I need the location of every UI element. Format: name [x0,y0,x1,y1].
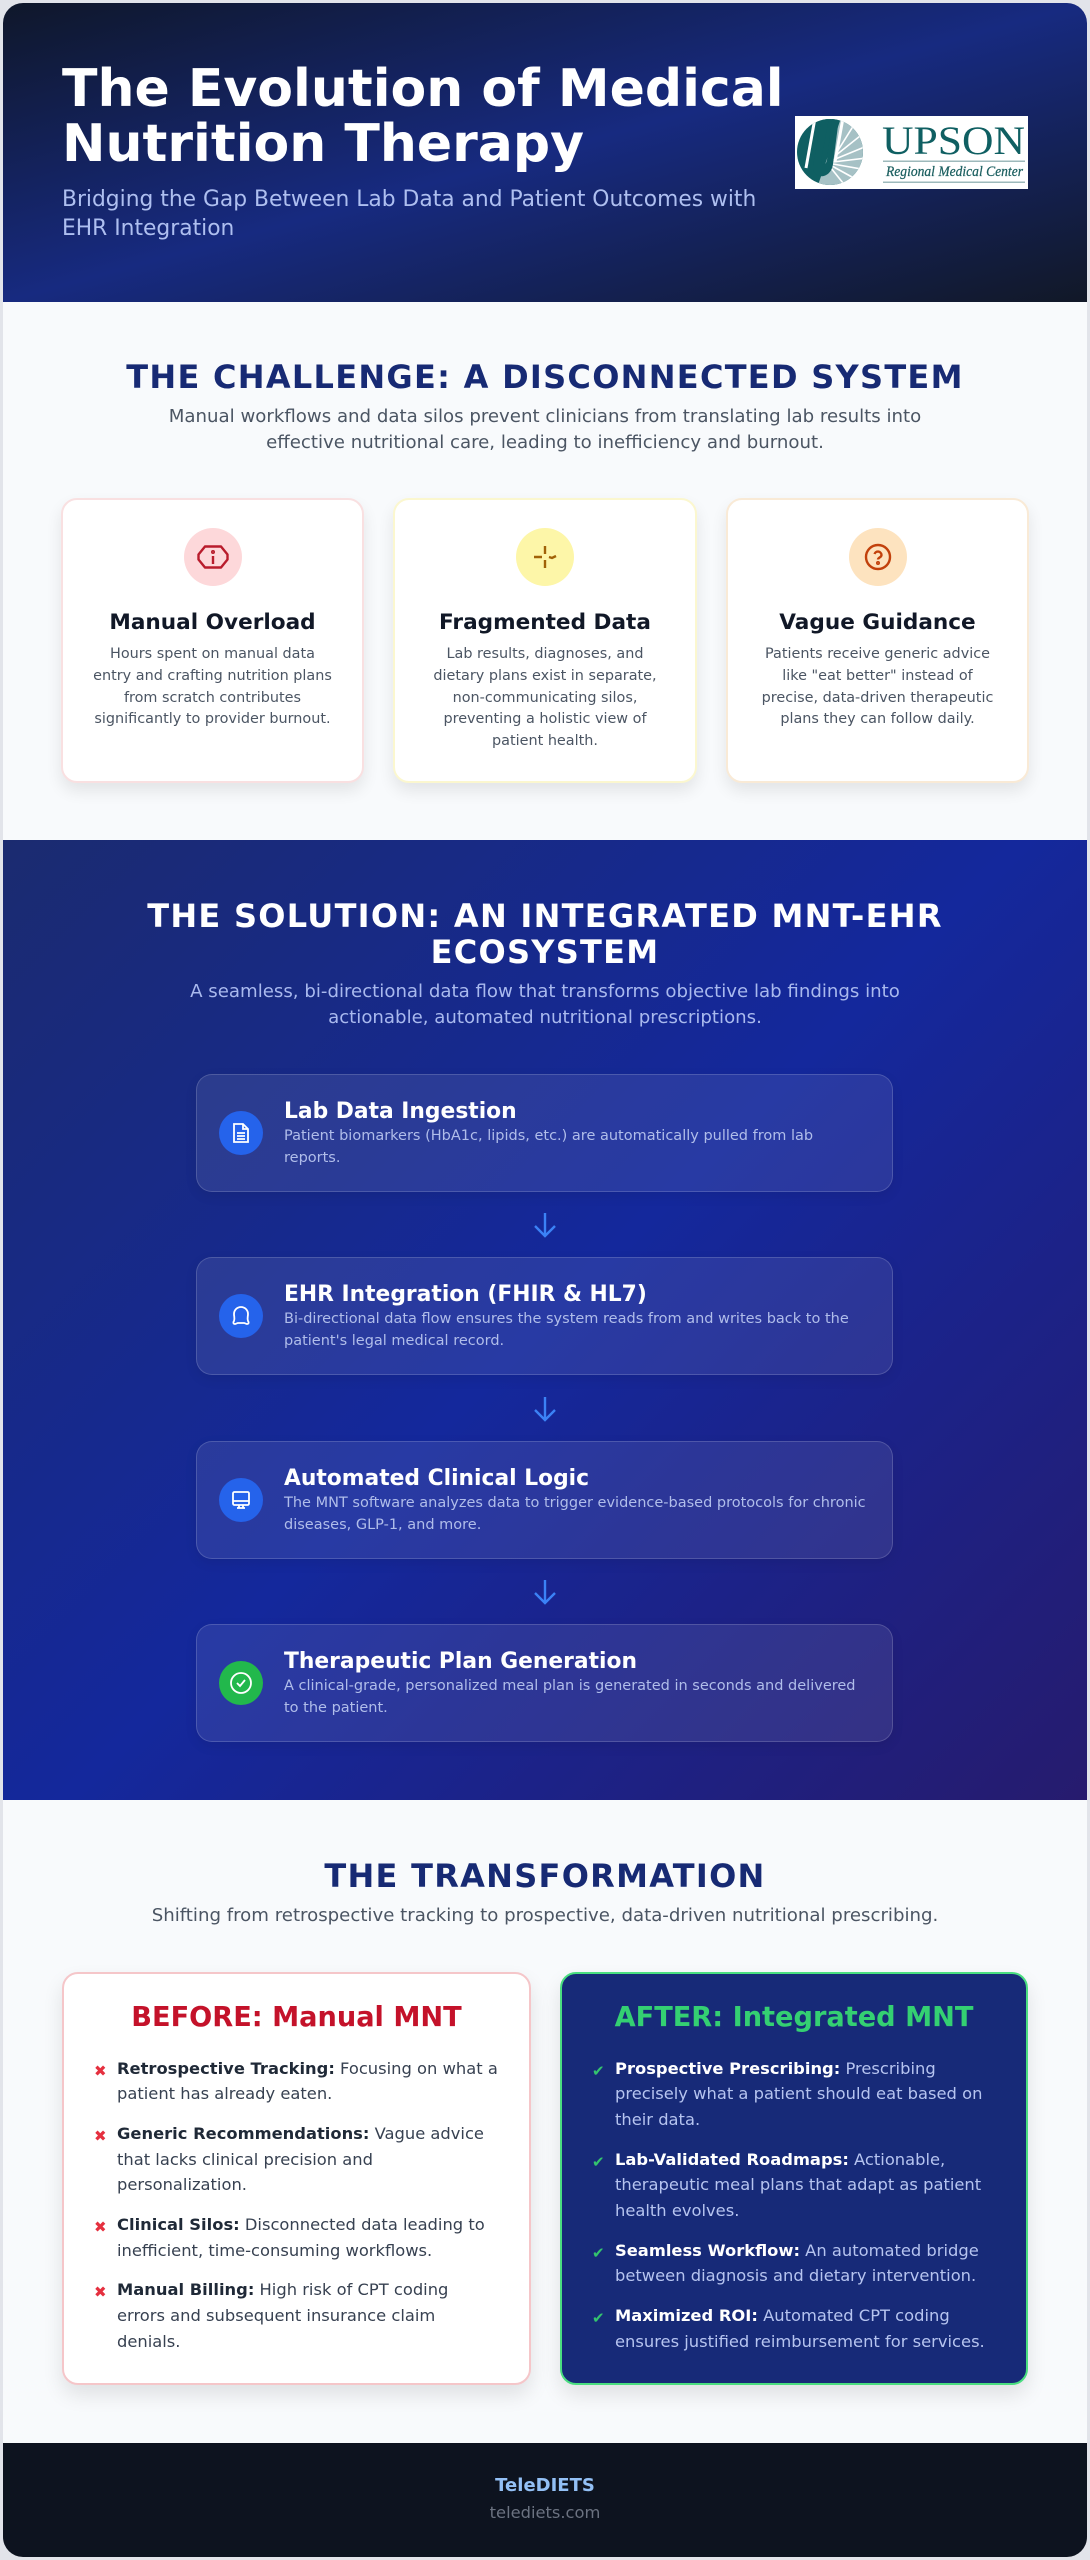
item: personalization. [117,2175,247,2194]
card text: preventing a holistic view of [443,711,647,727]
footer url: telediets.com [490,2503,600,2522]
solution intro text: A seamless, bi-directional data flow that transforms objective lab findings into [190,981,900,1002]
logo: Upson Regional Medical Center [795,116,1028,189]
item [592,2306,985,2351]
item [94,2124,484,2194]
step text [284,1678,856,1716]
step text [284,1311,849,1349]
item: therapeutic meal plans that adapt as patient [615,2175,981,2194]
solution heading [147,897,943,971]
step: automated clinical logic [196,1441,893,1559]
item: errors and subsequent insurance claim [117,2306,435,2325]
icon: puzzle [516,528,574,586]
item: between diagnosis and dietary intervention. [615,2266,976,2285]
step text: to the patient. [284,1700,388,1716]
icon: check circle [219,1661,263,1705]
item: patient has already eaten. [117,2084,332,2103]
item [94,2059,498,2103]
before heading: BEFORE: Manual MNT [131,2002,462,2033]
card text: entry and crafting nutrition plans [93,668,332,684]
icon: alert [184,528,242,586]
step: EHR integration [196,1257,893,1375]
step title: Lab Data Ingestion [284,1099,517,1124]
challenge intro text [169,406,921,453]
subtitle [62,187,756,241]
card: vague guidance [726,498,1029,783]
header banner [3,3,1087,302]
item [592,2059,982,2129]
item: ensures justified reimbursement for services. [615,2332,985,2351]
challenge intro text: effective nutritional care, leading to inefficiency and burnout. [266,432,824,453]
solution heading: ECOSYSTEM [431,933,659,971]
card text [762,646,993,727]
icon: link [219,1294,263,1338]
card text: dietary plans exist in separate, [433,668,657,684]
item: Manual Billing: High risk of CPT coding [117,2280,448,2299]
arrow [534,1213,556,1238]
card: manual overload [61,498,364,783]
step text: diseases, GLP-1, and more. [284,1517,481,1533]
card text: Hours spent on manual data [110,646,315,662]
item: health evolves. [615,2201,739,2220]
item: Clinical Silos: Disconnected data leading to [117,2215,485,2234]
challenge intro text: Manual workflows and data silos prevent clinicians from translating lab results into [169,406,921,427]
card text: from scratch contributes [124,690,301,706]
title: The Evolution of Medical [62,59,784,119]
icon: question [848,528,906,586]
card text [93,646,332,727]
solution intro text: actionable, automated nutritional prescriptions. [328,1007,762,1028]
footer brand: TeleDIETS [495,2474,595,2496]
panel: before: ✖ [94,2127,107,2145]
panel: after: ✔ [592,2153,605,2171]
subtitle: EHR Integration [62,216,234,241]
card text: precise, data-driven therapeutic [762,690,993,706]
panel: before [62,1972,531,2385]
step text [284,1128,813,1166]
item: Seamless Workflow: An automated bridge [615,2241,979,2260]
card text: Lab results, diagnoses, and [446,646,644,662]
item [94,2215,485,2260]
step text: reports. [284,1150,340,1166]
card text [433,646,657,749]
card title: Manual Overload [109,610,316,635]
card title: Vague Guidance [779,610,976,635]
card text: patient health. [492,733,598,749]
card: fragmented data [393,498,697,783]
item: denials. [117,2332,180,2351]
step title: Therapeutic Plan Generation [284,1649,637,1674]
panel: before: ✖ [94,2218,107,2236]
subtitle: Bridging the Gap Between Lab Data and Patient Outcomes with [62,187,756,212]
arrow [534,1397,556,1422]
item [592,2150,981,2220]
item: Lab-Validated Roadmaps: Actionable, [615,2150,945,2169]
item: their data. [615,2110,700,2129]
card text: like "eat better" instead of [782,668,973,684]
step title: EHR Integration (FHIR & HL7) [284,1282,647,1307]
section: the solution [3,840,1087,1800]
panel: after: ✔ [592,2062,605,2080]
step text: patient's legal medical record. [284,1333,504,1349]
item: Generic Recommendations: Vague advice [117,2124,484,2143]
item [592,2241,979,2285]
logo: Upson Regional Medical Center: UPSON [882,118,1025,163]
solution intro text [190,981,900,1028]
footer [3,2443,1087,2557]
card text: significantly to provider burnout. [94,711,331,727]
panel: after: ✔ [592,2244,605,2262]
step text: A clinical-grade, personalized meal plan is generated in seconds and delivered [284,1678,856,1694]
step: therapeutic plan generation [196,1624,893,1742]
arrow [534,1580,556,1605]
transformation intro text: Shifting from retrospective tracking to prospective, data-driven nutritional prescribing. [152,1905,938,1926]
section: the challenge [3,302,1087,840]
after heading: AFTER: Integrated MNT [615,2002,973,2033]
title [62,59,784,174]
panel: before: ✖ [94,2283,107,2301]
item: Retrospective Tracking: Focusing on what a [117,2059,498,2078]
panel: after [560,1972,1028,2385]
title: Nutrition Therapy [62,114,584,174]
icon: document [219,1111,263,1155]
item: Maximized ROI: Automated CPT coding [615,2306,950,2325]
section: the transformation heading: THE TRANSFORMATION [324,1857,766,1895]
step: lab data ingestion [196,1074,893,1192]
item [94,2280,448,2351]
step text: The MNT software analyzes data to trigger evidence-based protocols for chronic [284,1495,866,1511]
card text: Patients receive generic advice [765,646,990,662]
card title: Fragmented Data [439,610,651,635]
card text: plans they can follow daily. [780,711,975,727]
step text [284,1495,866,1533]
card text: non-communicating silos, [453,690,637,706]
item: precisely what a patient should eat based on [615,2084,982,2103]
step text: Bi-directional data flow ensures the system reads from and writes back to the [284,1311,849,1327]
step text: Patient biomarkers (HbA1c, lipids, etc.) are automatically pulled from lab [284,1128,813,1144]
item: Prospective Prescribing: Prescribing [615,2059,936,2078]
challenge heading: THE CHALLENGE: A DISCONNECTED SYSTEM [126,358,964,396]
icon: monitor [219,1478,263,1522]
step title: Automated Clinical Logic [284,1466,589,1491]
panel: before: ✖ [94,2062,107,2080]
panel: after: ✔ [592,2309,605,2327]
item: that lacks clinical precision and [117,2150,373,2169]
solution heading: THE SOLUTION: AN INTEGRATED MNT-EHR [147,897,943,935]
item: inefficient, time-consuming workflows. [117,2241,432,2260]
